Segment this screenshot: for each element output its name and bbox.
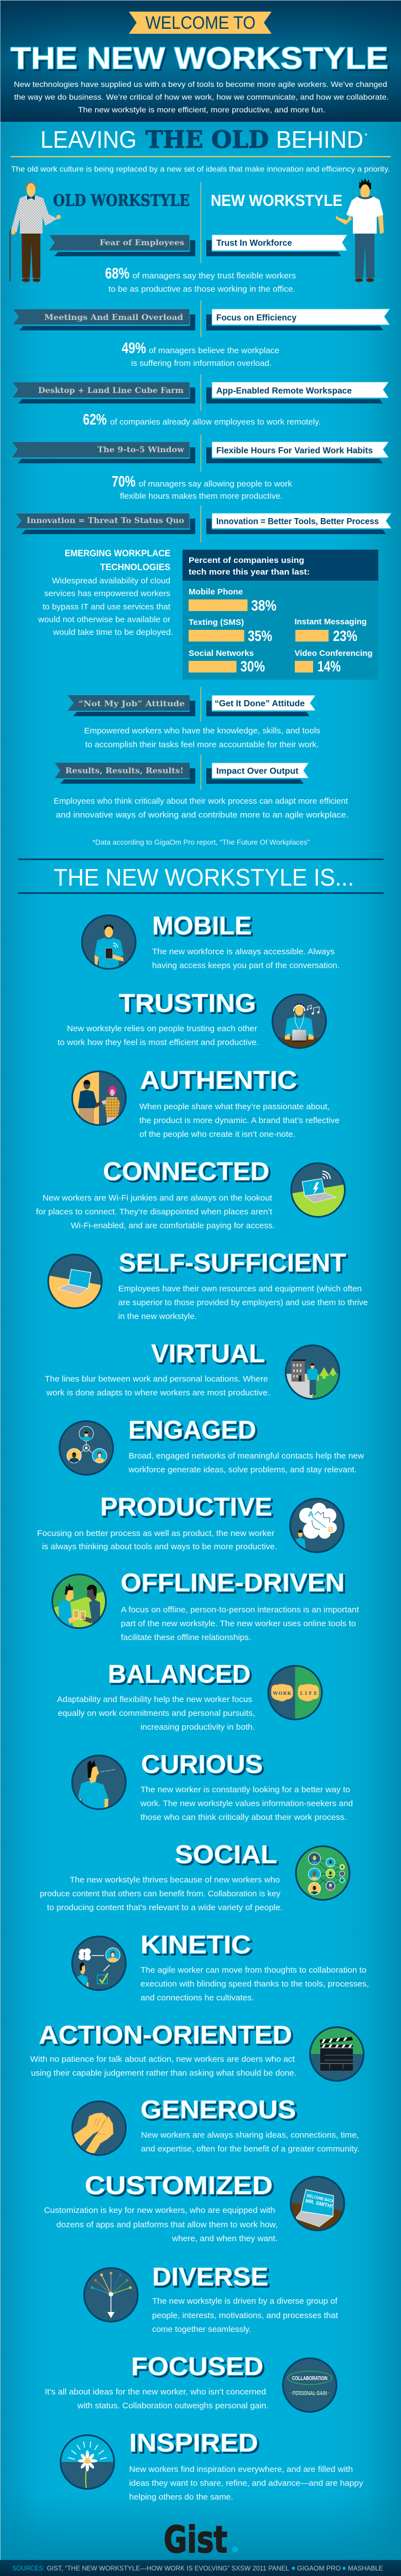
description xyxy=(129,2465,363,2502)
description: helping others do the same. xyxy=(129,2492,233,2502)
stat: 70%: of managers say allowing people to work xyxy=(138,479,293,489)
icon: person between building and trees xyxy=(285,1344,340,1400)
heading: leaving the old behind: THE OLD xyxy=(145,126,269,154)
comparison row 3: App-Enabled Remote Workspace xyxy=(216,386,352,396)
text block: emerging workplace technologies: TECHNOLOGIES xyxy=(100,562,170,572)
stat: 62% xyxy=(83,411,321,428)
comparison row 6: “Not My Job” Attitude xyxy=(79,700,185,708)
logo: Gist: Gist xyxy=(164,2518,227,2561)
comparison row 2 xyxy=(12,309,390,330)
description: When people share what they’re passionate about, xyxy=(139,1102,330,1111)
description xyxy=(36,1193,275,1230)
icon: two people toasting xyxy=(51,1574,107,1629)
icon: work and life fists: WORK xyxy=(272,1690,292,1696)
text block: emerging workplace technologies: would not otherwise be available or xyxy=(38,615,170,624)
comparison row 1: Trust In Workforce xyxy=(216,239,292,248)
icon: person with phone xyxy=(81,914,137,970)
description: The new workstyle is driven by a diverse group of xyxy=(152,2296,338,2306)
description xyxy=(44,2206,278,2243)
icon: open hands xyxy=(71,2101,127,2156)
heading: DIVERSE xyxy=(152,2262,268,2291)
description xyxy=(57,1695,255,1732)
panel: tech usage bar chart: Percent of companies using xyxy=(189,556,304,565)
stat: 70%: flexible hours makes them more productive. xyxy=(120,492,283,501)
stat: 49%: is suffering from information overload. xyxy=(131,359,272,368)
bar: texting: 35% xyxy=(248,628,272,644)
description: to producing content that’s relevant to a wide variety of people. xyxy=(47,1903,283,1912)
description: execution with blinding speed thanks to the tools, processes, xyxy=(140,1979,369,1989)
comparison row 4 xyxy=(11,442,389,463)
icon: personalized laptop: WELCOME BACK xyxy=(306,2193,335,2203)
footer: sources: SOURCES: xyxy=(12,2564,45,2572)
description: where, and when they want. xyxy=(171,2234,278,2243)
stat: 62%: of companies already allow employees to work remotely. xyxy=(110,417,321,427)
description xyxy=(139,1102,340,1139)
description: A focus on offline, person-to-person interactions is an important xyxy=(121,1605,360,1615)
heading: INSPIRED xyxy=(129,2428,258,2457)
description: and expertise, often for the benefit of a greater community. xyxy=(141,2144,360,2154)
entry: inspired xyxy=(60,2428,363,2502)
text block: emerging workplace technologies: to bypass IT and use services that xyxy=(43,602,171,612)
description: are superior to those provided by employers) and use them to thrive xyxy=(118,1298,368,1307)
heading: VIRTUAL xyxy=(151,1339,265,1368)
stat: 68% xyxy=(105,265,296,294)
heading: CURIOUS xyxy=(141,1750,263,1778)
subheading sentence: The old work culture is being replaced by a new set of ideals that make innovation and efficiency a priority. xyxy=(11,164,390,173)
panel: tech usage bar chart: tech more this year than last: xyxy=(189,567,310,577)
entry: productive xyxy=(37,1492,345,1553)
description: New workers are always sharing ideas, connections, time, xyxy=(141,2130,359,2140)
intro text: The new workstyle is more efficient, more productive, and more fun. xyxy=(78,105,325,114)
welcome ribbon: WELCOME TO xyxy=(145,13,256,33)
comparison row 2: Focus on Efficiency xyxy=(216,313,296,323)
bar: video conferencing xyxy=(294,649,373,675)
description: With no patience for talk about action, new workers are doers who act xyxy=(30,2055,295,2064)
column title: old workstyle: OLD WORKSTYLE xyxy=(53,191,190,210)
stat: 49%: 49% xyxy=(122,339,146,356)
text block: emerging workplace technologies: EMERGING WORKPLACE xyxy=(65,548,170,558)
bar: instant messaging: Instant Messaging xyxy=(294,617,367,627)
entry: virtual xyxy=(45,1339,340,1400)
description: workforce generate ideas, solve problems, and stay relevant. xyxy=(128,1465,357,1475)
description: increasing productivity in both. xyxy=(140,1722,255,1732)
description xyxy=(40,1875,283,1912)
text: employees think critically: Employees who think critically about their work process can adapt more efficient xyxy=(54,796,348,806)
heading: leaving the old behind: LEAVING xyxy=(40,126,137,153)
heading: TRUSTING xyxy=(119,989,256,1017)
icon: person with headphones and tablet xyxy=(272,994,327,1049)
comparison row 5: Innovation = Better Tools, Better Process xyxy=(216,517,379,526)
stat: 68%: to be as productive as those working in the office. xyxy=(108,285,295,294)
intro text xyxy=(14,80,389,114)
icon: work and life fists: LIFE xyxy=(300,1690,317,1696)
icon: two people on split background xyxy=(71,1070,127,1126)
comparison row 5: Innovation = Threat To Status Quo xyxy=(27,516,184,525)
text: empowered workers: to accomplish their tasks feel more accountable for their work. xyxy=(85,740,319,749)
footer: sources: GIGAOM PRO xyxy=(297,2564,341,2572)
text: employees think critically: and innovative ways of working and contribute more to an agile workplace. xyxy=(56,810,348,820)
heading: CUSTOMIZED xyxy=(85,2171,273,2200)
description: is always thinking about tools and ways to be more productive. xyxy=(42,1542,277,1551)
description xyxy=(121,1605,360,1642)
description: dozens of apps and platforms that allow them to work how, xyxy=(56,2220,278,2230)
bar: video conferencing: 14% xyxy=(317,658,341,675)
icon: idea to collaboration to check: ! xyxy=(83,1951,86,1960)
bar: social networks: Social Networks xyxy=(189,649,254,658)
heading: FOCUSED xyxy=(131,2352,263,2381)
icon: collaboration circled, personal gain struck out: COLLABORATION xyxy=(292,2376,327,2382)
description: to work how they feel is most efficient and productive. xyxy=(58,1038,259,1047)
bar: instant messaging: 23% xyxy=(333,628,357,644)
description: New workers are Wi-Fi junkies and are always on the lookout xyxy=(43,1193,273,1203)
comparison row 7: Impact Over Output xyxy=(216,767,299,776)
description: The new workstyle thrives because of new workers who xyxy=(70,1875,280,1885)
text: employees think critically xyxy=(54,796,348,820)
description: Adaptability and flexibility help the new worker focus xyxy=(57,1695,252,1704)
stat: 68%: of managers say they trust flexible workers xyxy=(133,271,296,281)
icon: network of three people xyxy=(59,1420,114,1476)
icon: idea to collaboration to check xyxy=(71,1936,127,1991)
description: The new worker is constantly looking for a better way to xyxy=(140,1785,350,1794)
description: The lines blur between work and personal locations. Where xyxy=(45,1374,268,1384)
description: those who can think critically about their work process. xyxy=(140,1813,347,1822)
description: work. The new workstyle values information-seekers and xyxy=(140,1799,353,1808)
entry: engaged xyxy=(59,1415,364,1476)
bar: social networks xyxy=(189,649,265,675)
comparison row 7: Results, Results, Results! xyxy=(65,767,184,775)
comparison row 6 xyxy=(67,695,316,716)
description: facilitate these offline relationships. xyxy=(121,1633,251,1642)
section rules xyxy=(18,858,384,894)
figure: new worker xyxy=(336,178,384,282)
entry: focused xyxy=(45,2352,337,2413)
icon: clapperboard xyxy=(309,2026,364,2082)
stat: 70% xyxy=(112,473,293,501)
comparison row 6: “Get It Done” Attitude xyxy=(215,699,305,708)
heading: ENGAGED xyxy=(128,1415,256,1444)
description: ideas they want to share, refine, and advance—and are happy xyxy=(129,2479,363,2488)
heading: SOCIAL xyxy=(175,1840,277,1869)
description: Customization is key for new workers, who are equipped with xyxy=(44,2206,275,2215)
intro text: the way we do business. We’re critical of how we work, how we communicate, and how we collaborate. xyxy=(14,92,389,101)
footnote: *Data according to GigaOm Pro report, “The Future Of Workplaces” xyxy=(92,839,310,846)
text: empowered workers: Empowered workers who have the knowledge, skills, and tools xyxy=(84,726,320,736)
bar: social networks: 30% xyxy=(240,658,265,675)
description: produce content that others can benefit from. Collaboration is key xyxy=(40,1889,280,1899)
icon: collaboration circled, personal gain struck out xyxy=(282,2357,337,2413)
bar: mobile phone: Mobile Phone xyxy=(189,587,243,597)
description: It’s all about ideas for the new worker, who isn’t concerned xyxy=(45,2387,266,2397)
entry: kinetic xyxy=(71,1935,368,2000)
entry: curious xyxy=(71,1750,353,1822)
entry: authentic xyxy=(71,1065,340,1139)
description: using their capable judgement rather than asking what should be done. xyxy=(31,2068,296,2078)
description: of the people who create it isn’t one-note. xyxy=(139,1130,295,1139)
heading: leaving the old behind: * xyxy=(364,131,368,140)
bar: video conferencing: Video Conferencing xyxy=(294,649,373,658)
entry: customized xyxy=(44,2171,345,2243)
comparison row 4: The 9-to-5 Window xyxy=(97,446,185,454)
heading: KINETIC xyxy=(140,1930,251,1959)
icon: personalized laptop: MR. SMITH! xyxy=(305,2198,333,2210)
comparison row 4: Flexible Hours For Varied Work Habits xyxy=(216,446,373,456)
description xyxy=(45,2387,269,2411)
main title: THE NEW WORKSTYLE xyxy=(11,40,388,75)
description xyxy=(152,947,340,970)
panel: tech usage bar chart xyxy=(183,550,378,680)
description: having access keeps you part of the conversation. xyxy=(152,961,340,970)
footer: sources xyxy=(0,2560,401,2576)
heading: MOBILE xyxy=(152,911,252,940)
entry: balanced xyxy=(57,1659,323,1732)
column title: new workstyle: NEW WORKSTYLE xyxy=(211,192,342,210)
comparison row 2: Meetings And Email Overload xyxy=(44,313,183,322)
entry: social xyxy=(40,1840,351,1912)
description xyxy=(140,1785,353,1822)
entry: mobile xyxy=(81,911,340,970)
icon: person looking up xyxy=(71,1755,127,1810)
description: work is done adapts to where workers are most productive. xyxy=(46,1388,270,1398)
heading: leaving the old behind xyxy=(40,126,368,154)
entry: connected xyxy=(36,1157,346,1230)
entry: self-sufficient xyxy=(48,1248,368,1321)
description: come together seamlessly. xyxy=(152,2325,251,2334)
heading: leaving the old behind: BEHIND xyxy=(276,126,363,153)
entry: offline-driven xyxy=(51,1568,360,1642)
description: part of the new workstyle. The new worker uses online tools to xyxy=(121,1619,356,1628)
description: Focusing on better process as well as product, the new worker xyxy=(37,1529,274,1538)
text: empowered workers xyxy=(84,726,320,749)
icon: thought cloud A to B: A xyxy=(308,1509,314,1518)
description: for places to connect. They’re disappointed when places aren’t xyxy=(36,1207,273,1217)
description xyxy=(118,1284,368,1321)
description: Employees have their own resources and equipment (which often xyxy=(118,1284,362,1294)
bar: instant messaging xyxy=(294,617,367,644)
icon: social network tree xyxy=(295,1845,351,1901)
description xyxy=(58,1024,259,1047)
bar: texting xyxy=(189,618,272,644)
description: New workstyle relies on people trusting each other xyxy=(67,1024,257,1033)
entry: generous xyxy=(71,2095,360,2156)
heading: BALANCED xyxy=(108,1659,251,1688)
description: people, interests, motivations, and processes that xyxy=(152,2311,338,2320)
header panel xyxy=(0,0,401,122)
icon: collaboration circled, personal gain struck out: PERSONAL GAIN xyxy=(293,2391,327,2397)
text block: emerging workplace technologies xyxy=(38,548,173,637)
heading: GENEROUS xyxy=(140,2095,296,2124)
stat: 49% xyxy=(122,339,279,368)
text block: emerging workplace technologies: would take time to be deployed. xyxy=(53,628,173,637)
section title: THE NEW WORKSTYLE IS... xyxy=(54,864,354,891)
comparison row 5 xyxy=(15,513,392,534)
footer: sources: GIST, “THE NEW WORKSTYLE—HOW WORK IS EVOLVING” SXSW 2011 PANEL xyxy=(47,2564,289,2572)
intro text: New technologies have supplied us with a bevy of tools to become more agile workers. We’ve changed xyxy=(14,80,387,89)
description: The new workforce is always accessible. Always xyxy=(152,947,335,956)
description xyxy=(30,2055,296,2078)
description: and connections he cultivates. xyxy=(140,1993,254,2003)
description: Wi-Fi-enabled, and are comfortable paying for access. xyxy=(71,1221,275,1230)
bar: mobile phone xyxy=(189,587,277,614)
comparison row 3 xyxy=(12,382,389,404)
description xyxy=(128,1451,364,1475)
icon: laptop xyxy=(48,1254,103,1309)
icon: laptop with wifi xyxy=(290,1162,346,1218)
description xyxy=(37,1529,277,1551)
comparison row 3: Desktop + Land Line Cube Farm xyxy=(38,386,184,395)
entry: diverse xyxy=(84,2262,338,2334)
comparison row 1 xyxy=(49,235,347,256)
description: with status. Collaboration outweighs personal gain. xyxy=(77,2401,268,2411)
text block: emerging workplace technologies: services has empowered workers xyxy=(44,589,170,598)
description: the product is more dynamic. A brand that’s reflective xyxy=(139,1116,340,1125)
description: equally on work commitments and personal pursuits, xyxy=(58,1709,255,1718)
heading: AUTHENTIC xyxy=(140,1065,297,1094)
stat: 70%: 70% xyxy=(112,473,136,490)
figure: old worker xyxy=(10,182,61,282)
comparison row 7 xyxy=(55,763,309,784)
description xyxy=(141,2130,360,2154)
description: New workers find inspiration everywhere, and are filled with xyxy=(129,2465,353,2474)
description: The agile worker can move from thoughts to collaboration to xyxy=(140,1965,366,1975)
heading: PRODUCTIVE xyxy=(100,1492,272,1521)
icon: personalized laptop xyxy=(290,2176,345,2231)
description xyxy=(45,1374,270,1398)
icon: daisy with rays xyxy=(60,2434,115,2490)
icon: work and life fists xyxy=(268,1665,323,1720)
heading: ACTION-ORIENTED xyxy=(39,2020,292,2049)
footer: sources: MASHABLE xyxy=(348,2564,383,2572)
description: Broad, engaged networks of meaningful contacts help the new xyxy=(128,1451,364,1461)
entry: action-oriented xyxy=(30,2020,364,2082)
center divider lines xyxy=(200,182,201,790)
heading: SELF-SUFFICIENT xyxy=(119,1248,346,1277)
bar: mobile phone: 38% xyxy=(251,597,277,614)
icon: thought cloud A to B: B xyxy=(328,1525,334,1534)
stat: 62%: 62% xyxy=(83,411,107,428)
description xyxy=(152,2296,338,2334)
description xyxy=(140,1965,369,2003)
comparison row 1: Fear of Employees xyxy=(100,239,184,247)
bar: texting: Texting (SMS) xyxy=(189,618,244,627)
heading: OFFLINE-DRIVEN xyxy=(121,1568,345,1597)
icon: converging coloured lines xyxy=(84,2267,139,2322)
text block: emerging workplace technologies: Widespread availability of cloud xyxy=(52,576,170,586)
description: in the new workstyle. xyxy=(118,1312,197,1321)
stat: 49%: of managers believe the workplace xyxy=(149,346,279,355)
icon: thought cloud A to B xyxy=(289,1498,345,1553)
entry: trusting xyxy=(58,989,327,1049)
heading: CONNECTED xyxy=(103,1157,269,1186)
stat: 68%: 68% xyxy=(105,265,129,282)
